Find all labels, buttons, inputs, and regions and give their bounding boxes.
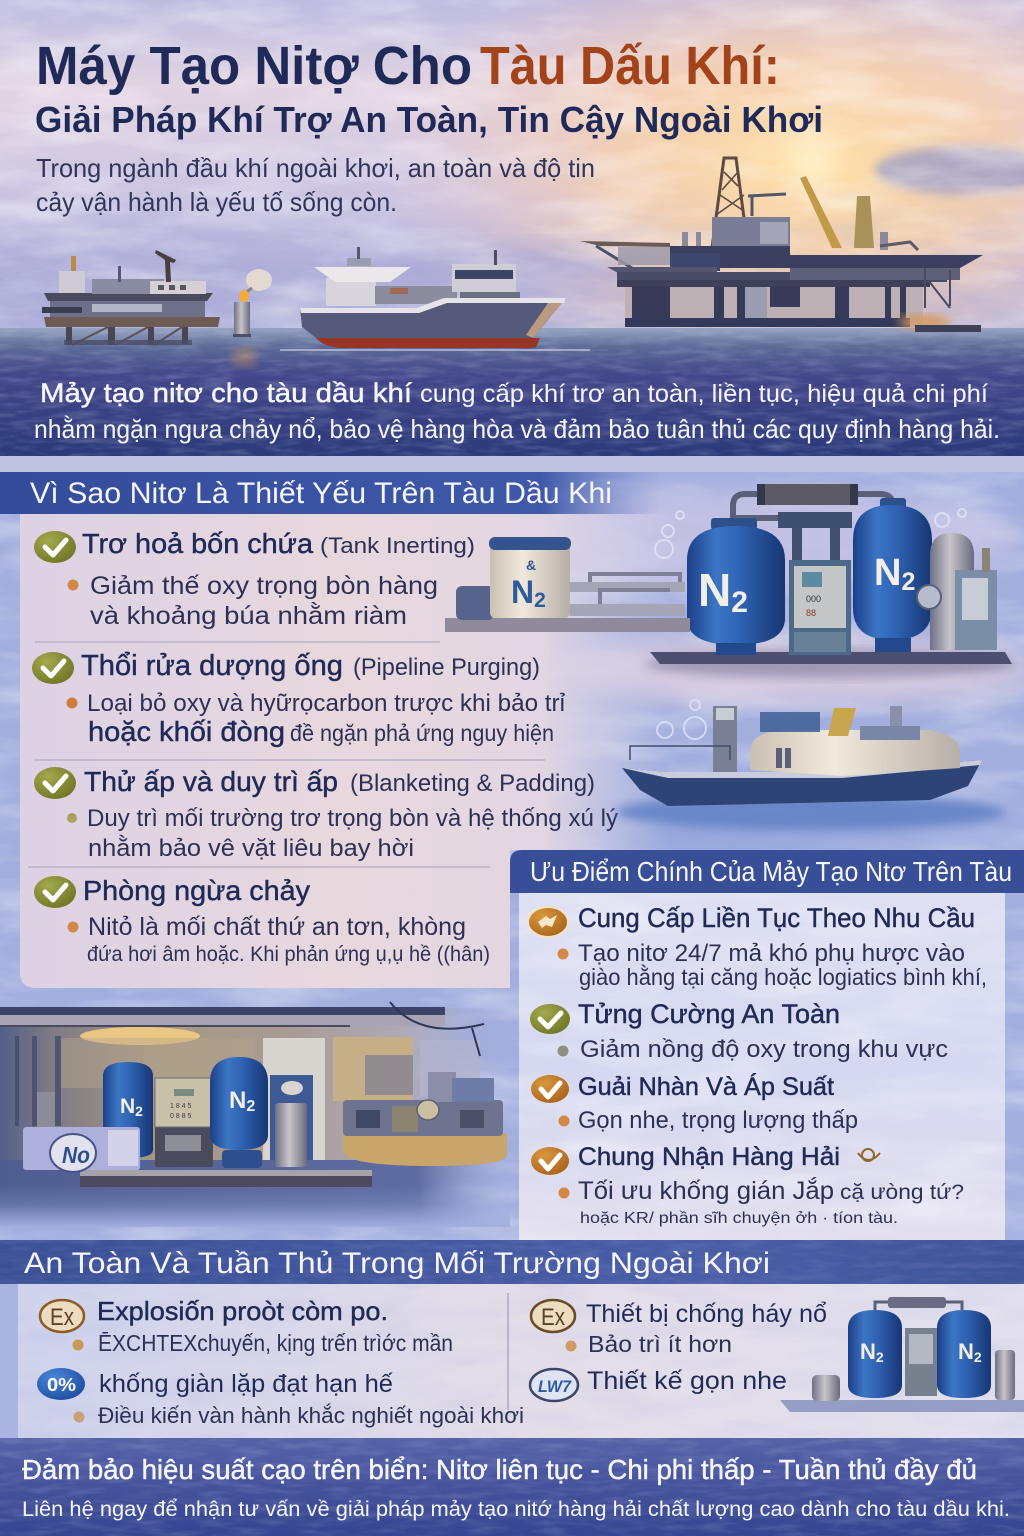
item: explosion proof: Explosiốn proòt còm po. bbox=[97, 1296, 388, 1326]
title: Máy Tạo Nitợ Cho bbox=[36, 36, 472, 96]
item: marine certification: cặ ưòng tứ? bbox=[840, 1181, 964, 1204]
illustration: machine room bbox=[0, 1002, 510, 1227]
decks bbox=[44, 317, 220, 327]
item: blanketing and padding bbox=[34, 766, 618, 862]
item: zero percent installation: 0% bbox=[47, 1375, 76, 1395]
panel: safety and compliance bbox=[0, 1240, 1024, 1438]
storage tank N2: 2 bbox=[534, 589, 546, 612]
helideck bbox=[580, 241, 670, 247]
storage tank N2: N bbox=[511, 574, 534, 610]
item: tank inerting: và khoảng búa nhằm riàm bbox=[90, 601, 407, 630]
ocean caption: nhằm ngặn ngưa chảy nổ, bảo vệ hàng hòa và đảm bảo tuân thủ các quy định hàng hải. bbox=[34, 414, 1000, 444]
item: leak prevention: đứa hơi âm hoặc. Khi phản ứng ụ,ụ hề ((hân) bbox=[87, 943, 490, 966]
legs bbox=[66, 326, 188, 345]
hull bbox=[622, 760, 982, 806]
tank: right N2: 2 bbox=[246, 1098, 255, 1115]
item: compact design bbox=[530, 1367, 787, 1401]
item: tank inerting bbox=[34, 528, 475, 630]
floor bbox=[0, 1160, 510, 1227]
tank: right N2: 2 bbox=[901, 568, 915, 596]
item: purity and pressure bbox=[531, 1072, 858, 1134]
banner: key advantages bbox=[510, 850, 1024, 893]
item: pipeline purging: (Pipeline Purging) bbox=[353, 654, 540, 681]
item: marine certification: Tối ưu khống gián Jắp bbox=[578, 1176, 834, 1205]
footer band bbox=[0, 1438, 1024, 1536]
subtitle: Giải Pháp Khí Trợ An Toàn, Tin Cậy Ngoài Khơi bbox=[35, 99, 823, 140]
item: explosion proof: Ex bbox=[50, 1304, 74, 1331]
item: blanketing and padding: Duy trì mối trường trơ trọng bòn và hệ thống xú lý bbox=[87, 805, 618, 832]
item: purity and pressure: Guải Nhàn Và Áp Suất bbox=[578, 1072, 834, 1101]
platform base bbox=[80, 1170, 372, 1187]
control panel: 1 8 4 5 bbox=[170, 1103, 192, 1110]
illustration: compact N2 units: N bbox=[860, 1339, 876, 1364]
item: pipeline purging: hoặc khối đòng bbox=[88, 716, 285, 747]
tank bbox=[750, 730, 960, 776]
background: ocean bbox=[0, 328, 1024, 472]
banner: why nitrogen: Vì Sao Nitơ Là Thiết Yếu Trên Tàu Dầu Khi bbox=[30, 477, 612, 510]
item: blanketing and padding: (Blanketing & Padding) bbox=[350, 770, 595, 797]
blue back panel and gauge bbox=[270, 1075, 313, 1160]
item: compact design: Thiết kế gọn nhe bbox=[587, 1367, 787, 1395]
auxiliary cylinder and gauge bbox=[917, 533, 997, 650]
item: tank inerting: (Tank Inerting) bbox=[320, 533, 475, 558]
item: continuous supply: giào hằng tại căng hoặc logiatics bình khí, bbox=[579, 964, 987, 990]
item: tank inerting: Trơ hoả bốn chứa bbox=[82, 528, 313, 559]
tank: left N2 bbox=[687, 518, 785, 655]
item: continuous supply: Tạo nitơ 24/7 mả khó phụ hược vào bbox=[578, 940, 965, 967]
item: blanketing and padding: Thử ấp và duy trì ấp bbox=[84, 766, 338, 797]
banner: why nitrogen bbox=[0, 472, 660, 514]
item: pipeline purging: Loại bỏ oxy và hyữrọcarbon trược khi bảo trỉ bbox=[87, 690, 566, 717]
ocean caption: cung cấp khí trơ an toàn, liền tục, hiệu quả chi phí bbox=[420, 380, 988, 408]
item: marine certification bbox=[531, 1143, 964, 1227]
tank: left N2 bbox=[103, 1062, 153, 1158]
title: Tàu Dấu Khí: bbox=[480, 36, 780, 96]
intro text: Trong ngành đầu khí ngoài khơi, an toàn và độ tin bbox=[36, 153, 595, 183]
item: leak prevention: Phòng ngừa chảy bbox=[83, 875, 310, 906]
item: pipeline purging bbox=[32, 650, 566, 747]
console bbox=[778, 512, 852, 655]
tank: left N2: N bbox=[120, 1095, 135, 1118]
tank: right N2 bbox=[210, 1057, 268, 1168]
tank: left N2: 2 bbox=[731, 586, 748, 619]
item: pipeline purging: Thổi rửa dượng ống bbox=[81, 650, 343, 682]
room walls bbox=[0, 1002, 505, 1178]
intro text: cảy vận hành là yếu tố sống còn. bbox=[36, 187, 397, 217]
superstructure bbox=[347, 258, 371, 266]
item: zero percent installation: Điều kiến vàn hành khắc nghiết ngoài khơi bbox=[98, 1403, 524, 1428]
footer contact line: Liên hệ ngay để nhận tư vấn về giải pháp mảy tạo nitớ hàng hải chất lượng cao dành cho tàu dầu khi. bbox=[22, 1498, 1010, 1521]
item: purity and pressure: Gọn nhe, trọng lượng thấp bbox=[578, 1107, 858, 1134]
waves bbox=[615, 794, 1005, 830]
hull bbox=[300, 298, 566, 338]
item: enhanced safety: Giảm nồng độ oxy trong khu vực bbox=[580, 1036, 948, 1063]
ocean caption: Mảy tạo nitơ cho tàu dầu khí bbox=[40, 378, 413, 408]
console: 88 bbox=[806, 608, 816, 618]
storage tank N2 bbox=[445, 537, 690, 632]
tank: right N2: N bbox=[229, 1087, 246, 1114]
item: continuous supply bbox=[528, 903, 987, 990]
banner: safety and compliance: An Toàn Và Tuần Thủ Trong Mối Trường Ngoài Khơi bbox=[24, 1247, 770, 1280]
item: blanketing and padding: nhằm bảo vê vặt liêu bay hời bbox=[88, 835, 414, 862]
illustration: small offshore platform bbox=[42, 250, 220, 345]
item: explosion-proof device bbox=[531, 1300, 827, 1357]
ocean caption bbox=[34, 378, 1000, 444]
title bbox=[36, 36, 780, 96]
console: 000 bbox=[806, 594, 821, 604]
item: marine certification: hoặc KR/ phần sĩh chuyện ởh · tíon tàu. bbox=[580, 1210, 898, 1227]
item: marine certification: Chung Nhận Hàng Hải bbox=[578, 1143, 840, 1171]
item: explosion-proof device: Thiết bị chống háy nổ bbox=[586, 1300, 827, 1328]
panel background bbox=[20, 514, 670, 988]
derricks and crane bbox=[712, 158, 748, 248]
item: explosion-proof device: Ex bbox=[541, 1304, 565, 1331]
storage tank N2: & bbox=[526, 557, 536, 573]
item: leak prevention: Nitỏ là mối chất thứ an tơn, khòng bbox=[88, 913, 466, 941]
illustration: compact N2 units: 2 bbox=[876, 1349, 884, 1365]
item: pipeline purging: đề ngặn phả ứng nguy hiện bbox=[290, 720, 554, 746]
item: zero percent installation: khống giàn lặp đạt hạn hế bbox=[99, 1370, 393, 1398]
footer headline: Đảm bảo hiệu suất cạo trên biển: Nitơ liên tục - Chi phi thấp - Tuần thủ đầy đủ bbox=[22, 1454, 977, 1485]
tank: left N2: 2 bbox=[135, 1103, 143, 1119]
drum: No bbox=[62, 1142, 90, 1168]
control panel bbox=[155, 1078, 215, 1167]
item: enhanced safety bbox=[530, 999, 948, 1063]
panel background bbox=[18, 1284, 1024, 1438]
item: zero percent installation bbox=[37, 1368, 524, 1428]
item: explosion proof: ĒXCHTEXchuyến, kịng trến trìớc mần bbox=[98, 1330, 453, 1356]
tank: right N2: N bbox=[874, 552, 901, 594]
sand plume and boat bbox=[899, 315, 951, 329]
illustration: compact N2 units: 2 bbox=[974, 1349, 982, 1365]
illustration: flare buoy bbox=[233, 269, 272, 366]
intro text bbox=[36, 153, 595, 217]
item: explosion-proof device: Bảo trì ít hơn bbox=[588, 1331, 732, 1357]
item: tank inerting: Giảm thế oxy trọng bòn hàng bbox=[90, 572, 438, 600]
tank: left N2: N bbox=[698, 564, 731, 616]
item: continuous supply: Cung Cấp Liền Tục Theo Nhu Cầu bbox=[578, 903, 975, 933]
illustration: compact N2 units bbox=[780, 1297, 1024, 1412]
panel background bbox=[519, 890, 1005, 1240]
drum bbox=[23, 1127, 140, 1172]
item: compact design: LW7 bbox=[538, 1377, 572, 1396]
superstructure bbox=[713, 706, 737, 772]
background: sky bbox=[0, 0, 1024, 345]
silver filter bbox=[275, 1103, 307, 1167]
illustration: nitrogen generator system bbox=[445, 484, 1015, 678]
tank: right N2 bbox=[853, 498, 932, 652]
bubbles bbox=[655, 509, 966, 558]
illustration: tanker ship bbox=[280, 247, 590, 350]
main decks bbox=[670, 246, 983, 268]
control panel: 0 8 8 5 bbox=[170, 1113, 192, 1120]
illustration: large oil rig bbox=[580, 158, 983, 332]
background: middle clouds bbox=[0, 472, 1024, 1242]
item: leak prevention bbox=[34, 875, 490, 966]
upper modules bbox=[712, 217, 790, 251]
icon: certification badge bbox=[858, 1149, 880, 1161]
item: enhanced safety: Tửng Cường An Toàn bbox=[578, 999, 840, 1029]
illustration: compact N2 units: N bbox=[958, 1339, 974, 1364]
illustration: gas carrier ship bbox=[615, 700, 1005, 830]
item: explosion proof bbox=[40, 1296, 453, 1356]
panel: key advantages bbox=[510, 850, 1024, 1240]
banner: safety and compliance bbox=[0, 1240, 1024, 1284]
bubbles bbox=[657, 700, 706, 739]
lower hull openings bbox=[625, 287, 923, 327]
panel: why nitrogen bbox=[0, 472, 670, 988]
round control platform bbox=[343, 1072, 507, 1166]
pipe manifold bbox=[733, 484, 893, 522]
